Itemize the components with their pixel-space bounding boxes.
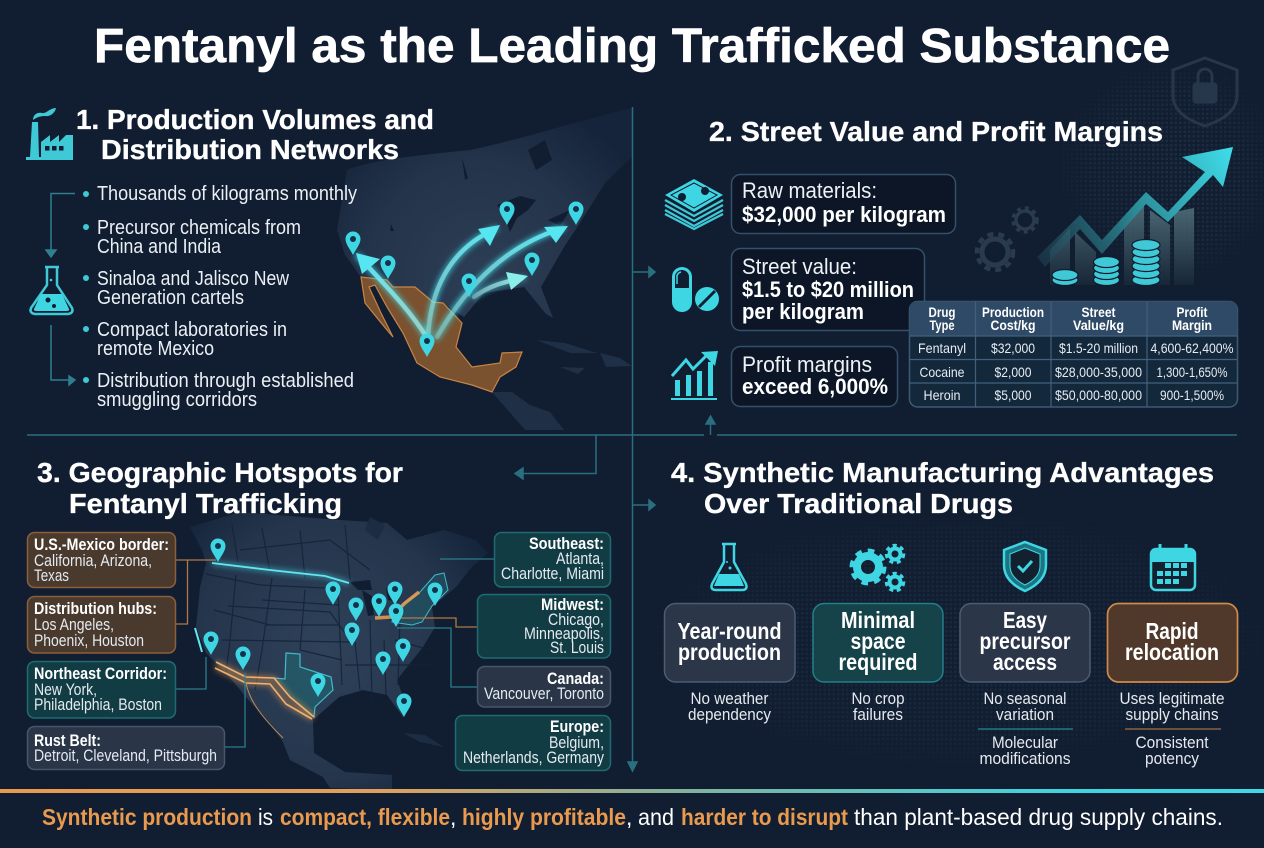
bullet list: production: Generation cartels (97, 287, 244, 309)
card: easy precursor access: precursor (980, 628, 1071, 654)
section 4 heading: Over Traditional Drugs (704, 488, 1013, 519)
label: Southeast: Atlanta, (556, 549, 604, 568)
callout: street value: per kilogram (742, 299, 864, 324)
icon: flask (30, 267, 72, 314)
table rows: 900-1,500% (1160, 387, 1224, 403)
table header: Production (982, 304, 1044, 320)
table rows: $28,000-35,000 (1055, 364, 1142, 380)
label: Midwest: Minneapolis, (524, 624, 604, 643)
dotted world map: top right (1080, 81, 1258, 259)
label: Northeast Corridor: New York, (34, 680, 97, 699)
callout: profit margins: exceed 6,000% (742, 374, 888, 399)
section 4 heading: 4. Synthetic Manufacturing Advantages (671, 457, 1214, 488)
caption: easy precursor: variation (996, 705, 1054, 724)
icon: gears (852, 546, 904, 590)
section 2 heading: 2. Street Value and Profit Margins (709, 116, 1163, 147)
label: Southeast: Southeast: (529, 534, 604, 553)
bullet list: production: Compact laboratories in (97, 319, 287, 341)
caption: rapid relocation: Consistent (1136, 733, 1209, 752)
icon: background padlock shield (1173, 58, 1237, 126)
icon: cash stack (665, 179, 723, 229)
footer takeaway: , (626, 804, 632, 830)
label: Northeast Corridor: Philadelphia, Boston (34, 695, 162, 714)
card: year-round production: Year-round (678, 618, 782, 644)
section 3 heading (37, 457, 403, 519)
card: minimal space required: space (850, 628, 906, 654)
bullet list: production: Precursor chemicals from (97, 217, 301, 239)
label: Distribution hubs (28, 596, 176, 653)
table header: Type (930, 317, 955, 333)
bullet list: production: Thousands of kilograms monthly (97, 183, 357, 205)
card: minimal space required: required (838, 649, 918, 675)
callout: street value: Street value: (742, 254, 857, 279)
card: minimal space required: Minimal (841, 607, 915, 633)
table header (928, 304, 1212, 333)
card: rapid relocation: relocation (1125, 639, 1219, 665)
footer gradient rule (0, 789, 1264, 793)
table header: Profit (1176, 304, 1208, 320)
label: Northeast Corridor (28, 662, 176, 718)
icon: shield (1004, 542, 1046, 591)
Texas highlight (274, 653, 333, 717)
section 4 heading (671, 457, 1214, 519)
table rows: $32,000 (991, 340, 1035, 356)
caption: minimal space: No crop (852, 689, 904, 708)
label: Northeast Corridor: Northeast Corridor: (34, 664, 167, 683)
caption: easy precursor: Molecular (992, 733, 1058, 752)
connector arrow: to last bullet (51, 325, 75, 385)
table rows: $1.5-20 million (1059, 340, 1138, 356)
bullet list: production (83, 183, 357, 411)
title: Fentanyl as the Leading Trafficked Substance (94, 20, 1170, 73)
caption: rapid relocation: Uses legitimate (1120, 689, 1224, 708)
caption: rapid relocation: potency (1145, 749, 1199, 768)
card: easy precursor access: Easy (1003, 607, 1047, 633)
callout: raw materials (732, 174, 956, 234)
callout: raw materials: $32,000 per kilogram (742, 202, 946, 227)
leader lines (175, 559, 494, 747)
callout: profit margins (732, 346, 898, 406)
section 1 heading: 1. Production Volumes and (76, 104, 434, 135)
connector arrow: to flask (46, 194, 75, 257)
card: easy precursor access (960, 604, 1090, 682)
label: Canada: Canada: (547, 669, 604, 688)
label: Europe: Belgium, (549, 733, 604, 752)
table header: Street (1082, 304, 1116, 320)
footer takeaway: and (638, 804, 674, 830)
table header: Margin (1172, 317, 1212, 333)
table rows: $2,000 (994, 364, 1032, 380)
card: rapid relocation (1108, 604, 1238, 682)
table rows: 1,300-1,650% (1156, 364, 1228, 380)
label: Midwest: Midwest: (541, 595, 604, 614)
label: U.S.-Mexico border: Texas (34, 566, 69, 585)
label: Midwest: Chicago, (548, 610, 604, 629)
label: Rust Belt: Rust Belt: (34, 731, 101, 750)
caption: minimal space (852, 689, 904, 724)
bullet list: production: Sinaloa and Jalisco New (97, 268, 289, 290)
comparison table (909, 301, 1238, 407)
table rows: Cocaine (920, 364, 965, 380)
footer takeaway: , (450, 804, 456, 830)
label: Southeast (494, 532, 610, 587)
caption: easy precursor: modifications (980, 749, 1070, 768)
icon: factory (26, 108, 73, 160)
label: U.S.-Mexico border (28, 532, 176, 588)
Canada border (195, 563, 349, 652)
section 3 heading: Fentanyl Trafficking (69, 488, 342, 519)
northeast highlight (392, 573, 448, 625)
callout: raw materials: Raw materials: (742, 178, 877, 203)
table rows (918, 340, 1234, 403)
caption: rapid relocation: supply chains (1126, 705, 1218, 724)
label: U.S.-Mexico border: U.S.-Mexico border: (34, 535, 169, 554)
label: Rust Belt (28, 726, 224, 770)
table header: Drug (928, 304, 956, 320)
callout: street value: $1.5 to $20 million (742, 277, 914, 302)
label: Europe: Europe: (550, 717, 604, 736)
label: U.S.-Mexico border: California, Arizona, (34, 551, 152, 570)
footer takeaway: Synthetic production (42, 804, 252, 830)
state borders (206, 525, 430, 700)
footer takeaway: compact, flexible (280, 804, 450, 830)
table rows: 4,600-62,400% (1150, 340, 1234, 356)
label: Europe (456, 716, 610, 770)
card: easy precursor access: access (993, 649, 1057, 675)
table rows: Fentanyl (918, 340, 966, 356)
bullet list: production: smuggling corridors (97, 389, 257, 411)
bullet list: production: remote Mexico (97, 338, 214, 360)
map: US hotspots (175, 512, 494, 790)
table rows: Heroin (924, 387, 960, 403)
label: Europe: Netherlands, Germany (463, 748, 604, 767)
bullet list: production: Distribution through established (97, 370, 354, 392)
table rows: $5,000 (994, 387, 1032, 403)
caption: minimal space: failures (853, 705, 903, 724)
label: Midwest: St. Louis (550, 638, 604, 657)
icon: small growth chart (671, 351, 718, 400)
location pins (346, 202, 584, 357)
Mexico border (215, 592, 419, 738)
label: Distribution hubs: Distribution hubs: (34, 599, 157, 618)
route arrows (358, 228, 562, 338)
section dividers and flow arrows (27, 107, 1237, 771)
label: Midwest (478, 594, 610, 658)
caption: year-round (688, 689, 771, 724)
section 1 heading: Distribution Networks (101, 134, 399, 165)
callout: profit margins: Profit margins (742, 352, 872, 377)
section 1 heading (76, 104, 434, 165)
label: Canada: Vancouver, Toronto (484, 684, 604, 703)
footer takeaway: is (258, 804, 273, 830)
caption: easy precursor (978, 689, 1073, 768)
label: Canada (478, 666, 610, 707)
table header: Cost/kg (990, 317, 1036, 333)
label: Rust Belt: Detroit, Cleveland, Pittsburgh (34, 746, 217, 765)
callout: street value (732, 248, 924, 330)
footer takeaway (42, 804, 1223, 830)
card: rapid relocation: Rapid (1146, 618, 1198, 644)
icon: flask (712, 544, 746, 590)
table rows: $50,000-80,000 (1055, 387, 1142, 403)
bullet list: production: China and India (97, 236, 222, 258)
caption: year-round: dependency (688, 705, 771, 724)
chart illustration: rising arrow with coin stacks (977, 147, 1233, 286)
label: Southeast: Charlotte, Miami (501, 564, 604, 583)
Mexico (361, 277, 522, 392)
caption: year-round: No weather (690, 689, 769, 708)
card: year-round production: production (678, 639, 781, 665)
label: Distribution hubs: Los Angeles, (34, 615, 114, 634)
card: minimal space required (813, 604, 943, 682)
card: year-round production (664, 604, 795, 682)
map: North America with Mexico trafficking routes (337, 108, 632, 430)
caption: rapid relocation (1120, 689, 1224, 768)
footer takeaway: than plant-based drug supply chains. (854, 804, 1223, 830)
footer takeaway: highly profitable (462, 804, 626, 830)
icon: pills (672, 267, 719, 312)
caption: easy precursor: No seasonal (984, 689, 1066, 708)
hotspot pins (204, 538, 442, 717)
table header: Value/kg (1073, 317, 1124, 333)
icon: calendar (1151, 544, 1195, 590)
footer takeaway: harder to disrupt (681, 804, 848, 830)
label: Distribution hubs: Phoenix, Houston (34, 631, 144, 650)
dotted world map: section 4 (730, 540, 1190, 740)
section 3 heading: 3. Geographic Hotspots for (37, 457, 403, 488)
